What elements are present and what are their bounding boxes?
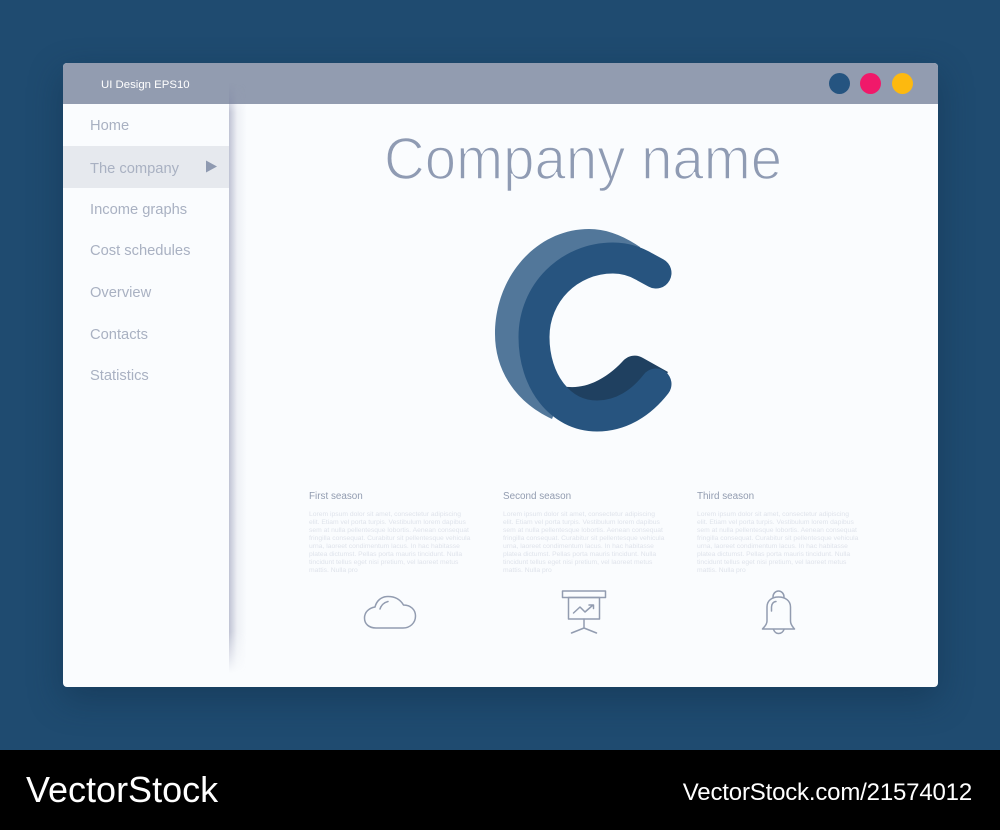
season column one text: elit. Etiam vel porta turpis. Vestibulum lorem dapibus: [309, 519, 466, 526]
sidebar shadow: [229, 101, 241, 668]
season column two text: urna, laoreet condimentum lacus. In hac habitasse: [503, 543, 654, 550]
title bar: [63, 63, 938, 104]
season column one text: [309, 511, 470, 574]
footer watermark bar: [0, 750, 1000, 830]
season column two text: fringilla consequat. Curabitur sit pellentesque vehicula: [503, 535, 664, 542]
season column one text: urna, laoreet condimentum lacus. In hac habitasse: [309, 543, 460, 550]
season column three text: platea dictumst. Pellas porta mauris tincidunt. Nulla: [697, 551, 850, 558]
window control: pink dot: [860, 73, 881, 94]
season column two text: elit. Etiam vel porta turpis. Vestibulum lorem dapibus: [503, 519, 660, 526]
season column three text: fringilla consequat. Curabitur sit pellentesque vehicula: [697, 535, 858, 542]
logo inner face, dark: [562, 356, 668, 412]
season column three text: mattis. Nulla pro: [697, 567, 746, 574]
season column three text: [697, 511, 858, 574]
footer brand name: VectorStock: [26, 769, 218, 810]
season column one text: fringilla consequat. Curabitur sit pellentesque vehicula: [309, 535, 470, 542]
menu item: contacts: Contacts: [90, 327, 148, 343]
icon: bell: [762, 590, 796, 634]
window control: yellow dot: [892, 73, 913, 94]
season column one text: tincidunt tellus eget nisi pretium, vel laoreet metus: [309, 559, 458, 566]
logo: 3D letter C: [495, 229, 672, 432]
menu item: home: Home: [90, 118, 129, 134]
menu item: cost schedules: Cost schedules: [90, 243, 190, 259]
browser window panel: [63, 63, 938, 687]
footer image URL: VectorStock.com/21574012: [683, 779, 972, 806]
season column two text: sem at nulla pellentesque lobortis. Aenean consequat: [503, 527, 663, 534]
menu item: the company, selected: The company: [90, 161, 179, 177]
season column three heading: Third season: [697, 490, 754, 502]
season column one text: mattis. Nulla pro: [309, 567, 358, 574]
season column two text: platea dictumst. Pellas porta mauris tincidunt. Nulla: [503, 551, 656, 558]
season column three text: urna, laoreet condimentum lacus. In hac habitasse: [697, 543, 848, 550]
menu item: income graphs: Income graphs: [90, 202, 187, 218]
title bar label: UI Design EPS10: [101, 79, 190, 91]
icon: presentation board: [562, 590, 606, 634]
season column two text: Lorem ipsum dolor sit amet, consectetur adipiscing: [503, 511, 655, 518]
season column two heading: Second season: [503, 490, 571, 502]
season column three text: sem at nulla pellentesque lobortis. Aenean consequat: [697, 527, 857, 534]
navigation menu: [63, 118, 229, 384]
season column one heading: First season: [309, 490, 363, 502]
season column two text: tincidunt tellus eget nisi pretium, vel laoreet metus: [503, 559, 652, 566]
menu item: statistics: Statistics: [90, 368, 149, 384]
logo front face: [534, 258, 656, 416]
heading: company name: Company name: [384, 126, 782, 192]
icon: menu arrow: [206, 160, 217, 172]
window control: blue dot: [829, 73, 850, 94]
season column three text: tincidunt tellus eget nisi pretium, vel laoreet metus: [697, 559, 846, 566]
season column three text: elit. Etiam vel porta turpis. Vestibulum lorem dapibus: [697, 519, 854, 526]
icon: cloud: [364, 596, 416, 629]
menu item: the company, selected: [63, 146, 229, 188]
season column two text: [503, 511, 664, 574]
season column two text: mattis. Nulla pro: [503, 567, 552, 574]
menu item: overview: Overview: [90, 285, 151, 301]
season column one text: Lorem ipsum dolor sit amet, consectetur adipiscing: [309, 511, 461, 518]
logo side face, light: [495, 229, 640, 419]
season column three text: Lorem ipsum dolor sit amet, consectetur adipiscing: [697, 511, 849, 518]
season column one text: sem at nulla pellentesque lobortis. Aenean consequat: [309, 527, 469, 534]
season column one text: platea dictumst. Pellas porta mauris tincidunt. Nulla: [309, 551, 462, 558]
